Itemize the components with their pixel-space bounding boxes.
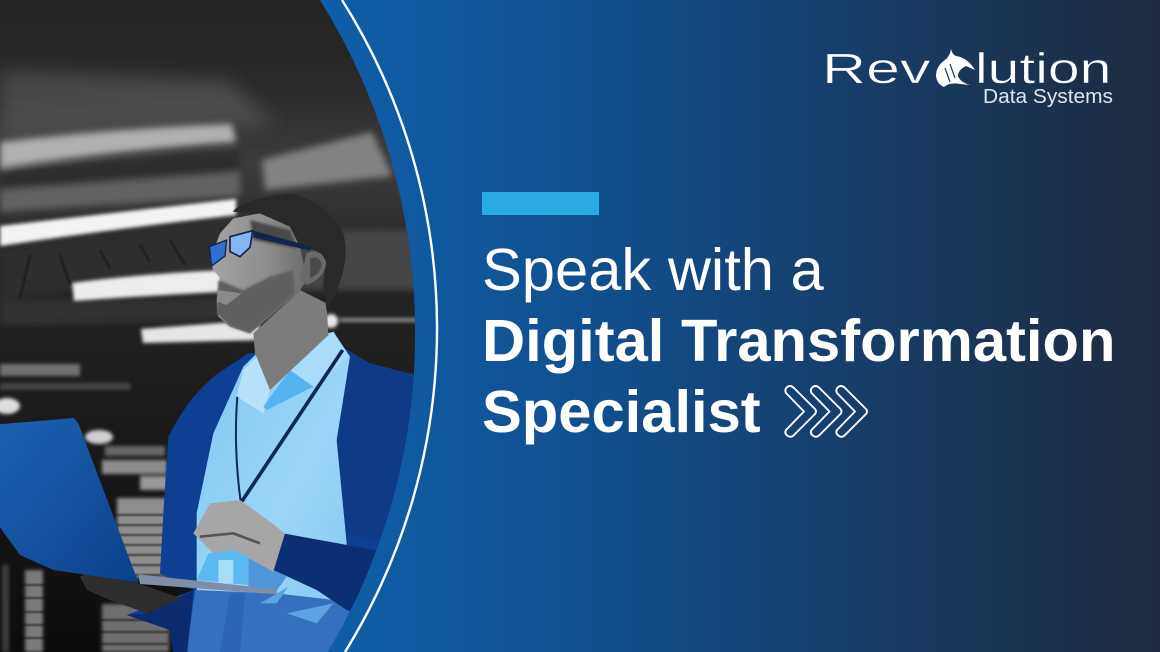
- lanyard: [242, 350, 343, 502]
- heading line 3: Specialist: [482, 378, 761, 445]
- logo wordmark: Rev: Rev: [822, 45, 931, 93]
- ear: [304, 251, 326, 285]
- lower sleeve: [127, 590, 193, 652]
- logo wordmark: lution: lution: [975, 45, 1111, 93]
- ceiling lights: [0, 199, 420, 652]
- man (coordinates from the 3x crop): [0, 193, 423, 652]
- curved white line: [342, 0, 437, 652]
- icon: triple chevron arrow: [785, 386, 867, 437]
- mouth: [217, 290, 242, 305]
- shirt lower: [187, 590, 363, 652]
- photo: man with laptop in data center: [0, 0, 440, 652]
- eye shadow: [250, 220, 297, 248]
- photo backdrop: warehouse ceiling: [0, 0, 440, 652]
- id badge: [197, 550, 248, 585]
- face: [210, 213, 307, 333]
- shirt: [197, 332, 350, 607]
- logo subtitle: Data Systems: [983, 86, 1113, 108]
- logo icon: sail: [936, 49, 975, 87]
- neck: [253, 290, 328, 390]
- laptop lid: [0, 418, 138, 582]
- lower hand: [80, 574, 182, 614]
- head: [209, 193, 346, 390]
- heading line 2: Digital Transformation: [482, 307, 1115, 374]
- hair: [233, 193, 346, 312]
- laptop base: [138, 574, 277, 594]
- hand: [193, 500, 285, 572]
- logo: [822, 45, 1113, 108]
- beard: [217, 270, 295, 333]
- heading line 1: Speak with a: [482, 236, 825, 303]
- jacket: [127, 348, 423, 652]
- sleeve arm: [273, 533, 383, 613]
- heading: [482, 236, 1115, 445]
- accent bar: [482, 192, 599, 215]
- shirt below hand: [248, 557, 287, 591]
- glasses: [253, 231, 312, 251]
